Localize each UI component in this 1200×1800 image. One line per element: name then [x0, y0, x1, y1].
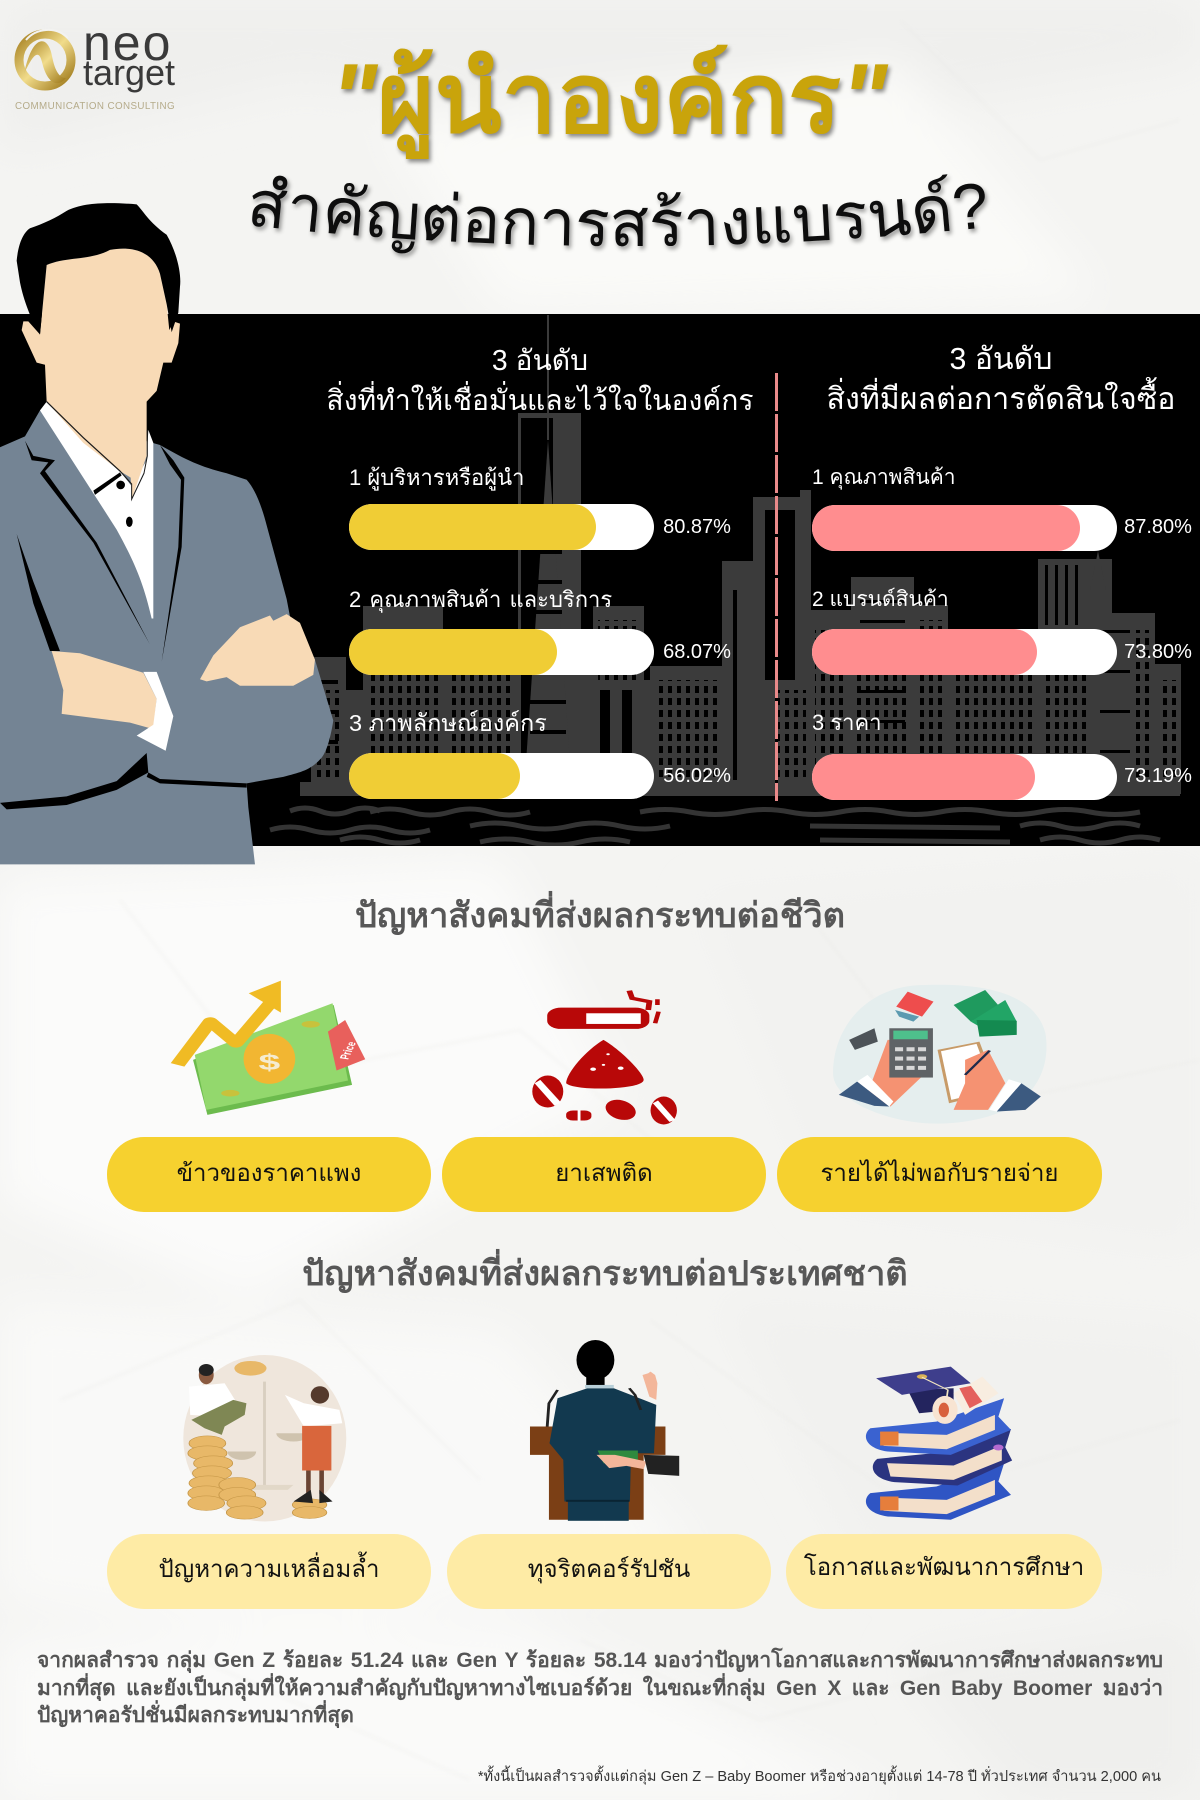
- logo: neo target: [14, 15, 175, 112]
- right hand: [200, 614, 315, 686]
- panel: trust ranking: [326, 344, 754, 799]
- value 2: 68.07%: [663, 641, 731, 663]
- heading: purchase ranking: สิ่งที่มีผลต่อการตัดสินใจซื้อ: [827, 383, 1175, 416]
- bar 2: [349, 629, 654, 675]
- logo tagline: COMMUNICATION CONSULTING: [15, 101, 175, 112]
- footnote: *ทั้งนี้เป็นผลสำรวจตั้งแต่กลุ่ม Gen Z – Baby Boomer หรือช่วงอายุตั้งแต่ 14-78 ปี ทั่วประเทศ จำนวน 2,000 คน: [478, 1769, 1161, 1785]
- bar 3: [812, 754, 1117, 800]
- jacket: [0, 410, 333, 864]
- shirt: [40, 402, 153, 619]
- heading: purchase ranking: [827, 343, 1175, 416]
- icon: rising prices: [170, 980, 366, 1115]
- logo wordmark neo: neo: [83, 15, 172, 71]
- label 3: 3 ราคา: [812, 710, 882, 735]
- pill: education: [786, 1534, 1102, 1609]
- left forearm: [52, 651, 157, 729]
- bar 2: [812, 629, 1117, 675]
- summary text: จากผลสำรวจ กลุ่ม Gen Z ร้อยละ 51.24 และ Gen Y ร้อยละ 58.14 มองว่าปัญหาโอกาสและการพัฒนาการศึกษาส่งผลกระทบ: [37, 1649, 1163, 1672]
- value 3: 56.02%: [663, 765, 731, 787]
- pill: cost of living: ข้าวของราคาแพง: [177, 1160, 361, 1187]
- subtitle: สำคัญต่อการสร้างแบรนด์?: [252, 174, 990, 259]
- black skyline band: [0, 314, 1200, 846]
- bar 3: [349, 753, 654, 799]
- jacket shadow lines: [0, 441, 247, 809]
- shirt cuff: [137, 672, 173, 751]
- pill: income: [777, 1137, 1102, 1212]
- heading: trust ranking: สิ่งที่ทำให้เชื่อมั่นและไว้ใจในองค์กร: [326, 384, 754, 416]
- hair: [17, 203, 180, 334]
- pill: cost of living: [107, 1137, 431, 1212]
- icon: education: [866, 1366, 1012, 1520]
- summary text: ปัญหาคอรัปชั่นมีผลกระทบมากที่สุด: [37, 1704, 354, 1727]
- label 3: 3 ภาพลักษณ์องค์กร: [349, 710, 547, 736]
- divider: [775, 373, 778, 801]
- bar 1: [349, 504, 654, 550]
- icon: drugs: [532, 990, 677, 1124]
- pill: education: โอกาสและพัฒนาการศึกษา: [804, 1554, 1084, 1581]
- city skyline silhouette: [300, 315, 1181, 796]
- value 1: 87.80%: [1124, 516, 1192, 538]
- icon: rising prices: Price: [339, 1041, 360, 1060]
- label 2: 2 แบรนด์สินค้า: [812, 588, 949, 611]
- label 1: 1 คุณภาพสินค้า: [812, 466, 956, 489]
- value 3: 73.19%: [1124, 765, 1192, 787]
- skin: face and neck: [22, 249, 180, 499]
- summary text: มากที่สุด และยังเป็นกลุ่มที่ให้ความสำคัญกับปัญหาทางไซเบอร์ด้วย ในขณะที่กลุ่ม Gen X และ Gen Baby Boomer มองว่า: [37, 1676, 1163, 1700]
- section heading: life problems: ปัญหาสังคมที่ส่งผลกระทบต่อชีวิต: [355, 897, 845, 935]
- heading: purchase ranking: 3 อันดับ: [949, 343, 1053, 376]
- section heading: national problems: ปัญหาสังคมที่ส่งผลกระทบต่อประเทศชาติ: [302, 1255, 908, 1293]
- summary text: [37, 1648, 1163, 1728]
- icon: inequality: [183, 1355, 346, 1522]
- businessman figure: [0, 203, 334, 864]
- title: "ผู้นำองค์กร": [331, 43, 887, 153]
- pill: drugs: [442, 1137, 766, 1212]
- pill: drugs: ยาเสพติด: [555, 1160, 653, 1187]
- water waves: [270, 808, 1160, 845]
- pill: corruption: [447, 1534, 771, 1609]
- icon: rising prices: $: [259, 1049, 281, 1075]
- pill: inequality: [107, 1534, 431, 1609]
- pill: income: รายได้ไม่พอกับรายจ่าย: [820, 1160, 1058, 1187]
- panel: purchase ranking: [812, 343, 1192, 800]
- label 1: 1 ผู้บริหารหรือผู้นำ: [349, 465, 525, 490]
- logo ring mark: [14, 30, 76, 90]
- value 1: 80.87%: [663, 516, 731, 538]
- heading: trust ranking: 3 อันดับ: [492, 344, 588, 376]
- heading: trust ranking: [326, 344, 754, 416]
- pill: corruption: ทุจริตคอร์รัปชัน: [528, 1556, 690, 1583]
- icon: corruption: [530, 1340, 680, 1521]
- bar 1: [812, 505, 1117, 551]
- value 2: 73.80%: [1124, 641, 1192, 663]
- pill: inequality: ปัญหาความเหลื่อมล้ำ: [159, 1556, 379, 1583]
- logo wordmark target: target: [83, 52, 175, 93]
- skyline windows: [320, 510, 1130, 780]
- label 2: 2 คุณภาพสินค้า และบริการ: [349, 587, 612, 612]
- icon: budget: [833, 985, 1046, 1124]
